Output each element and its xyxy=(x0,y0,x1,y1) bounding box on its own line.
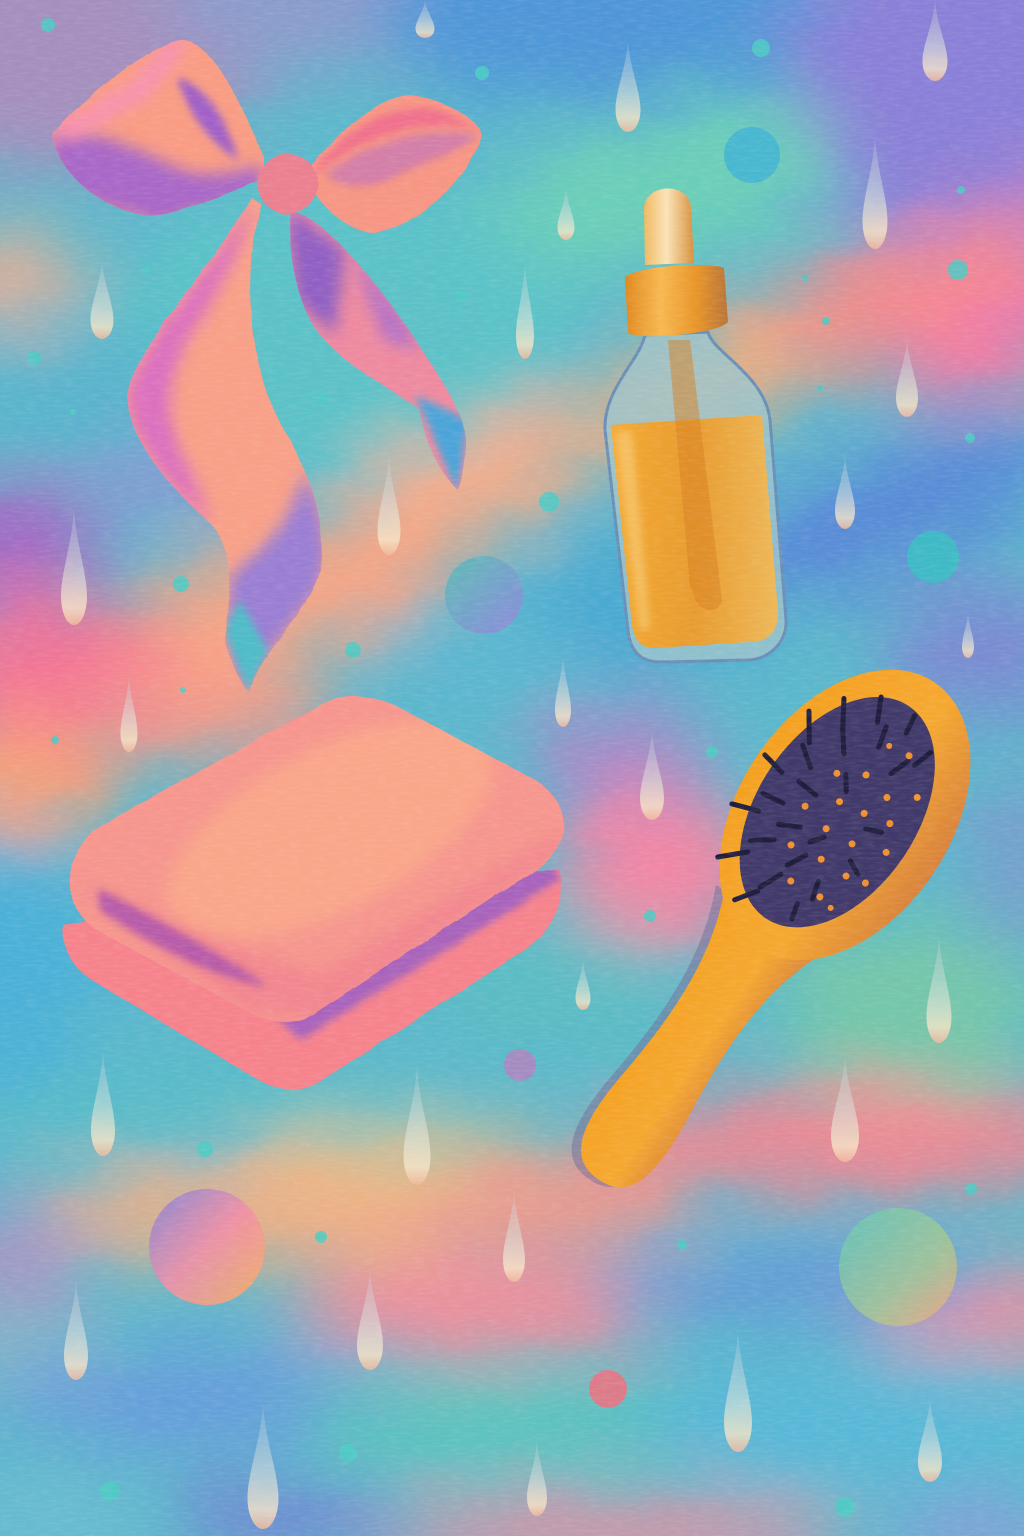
icon: ribbon bow xyxy=(40,30,490,700)
large bubbles xyxy=(149,127,959,1408)
brush cushion xyxy=(699,661,975,963)
icon: wooden hair brush xyxy=(508,623,1022,1243)
brush head xyxy=(668,623,1022,1007)
brush shadow xyxy=(540,885,815,1213)
bow left loop xyxy=(52,40,264,216)
bottle glass body xyxy=(605,332,786,662)
bow right tail xyxy=(290,212,466,490)
upper towel xyxy=(70,696,564,1022)
brush handle xyxy=(549,885,825,1213)
dropper collar xyxy=(625,265,728,336)
bow right loop xyxy=(312,95,482,233)
brush bristle tips xyxy=(761,718,943,921)
dropper bulb xyxy=(644,188,694,265)
dropper tube xyxy=(668,340,722,610)
oil xyxy=(611,415,778,648)
bow left tail xyxy=(127,198,322,693)
bow knot xyxy=(258,154,318,214)
brush bristles xyxy=(688,658,950,949)
lower towel xyxy=(62,870,562,1090)
icon: folded towels xyxy=(62,696,564,1090)
bottle highlight xyxy=(615,430,650,630)
icon: serum dropper bottle xyxy=(605,188,786,662)
